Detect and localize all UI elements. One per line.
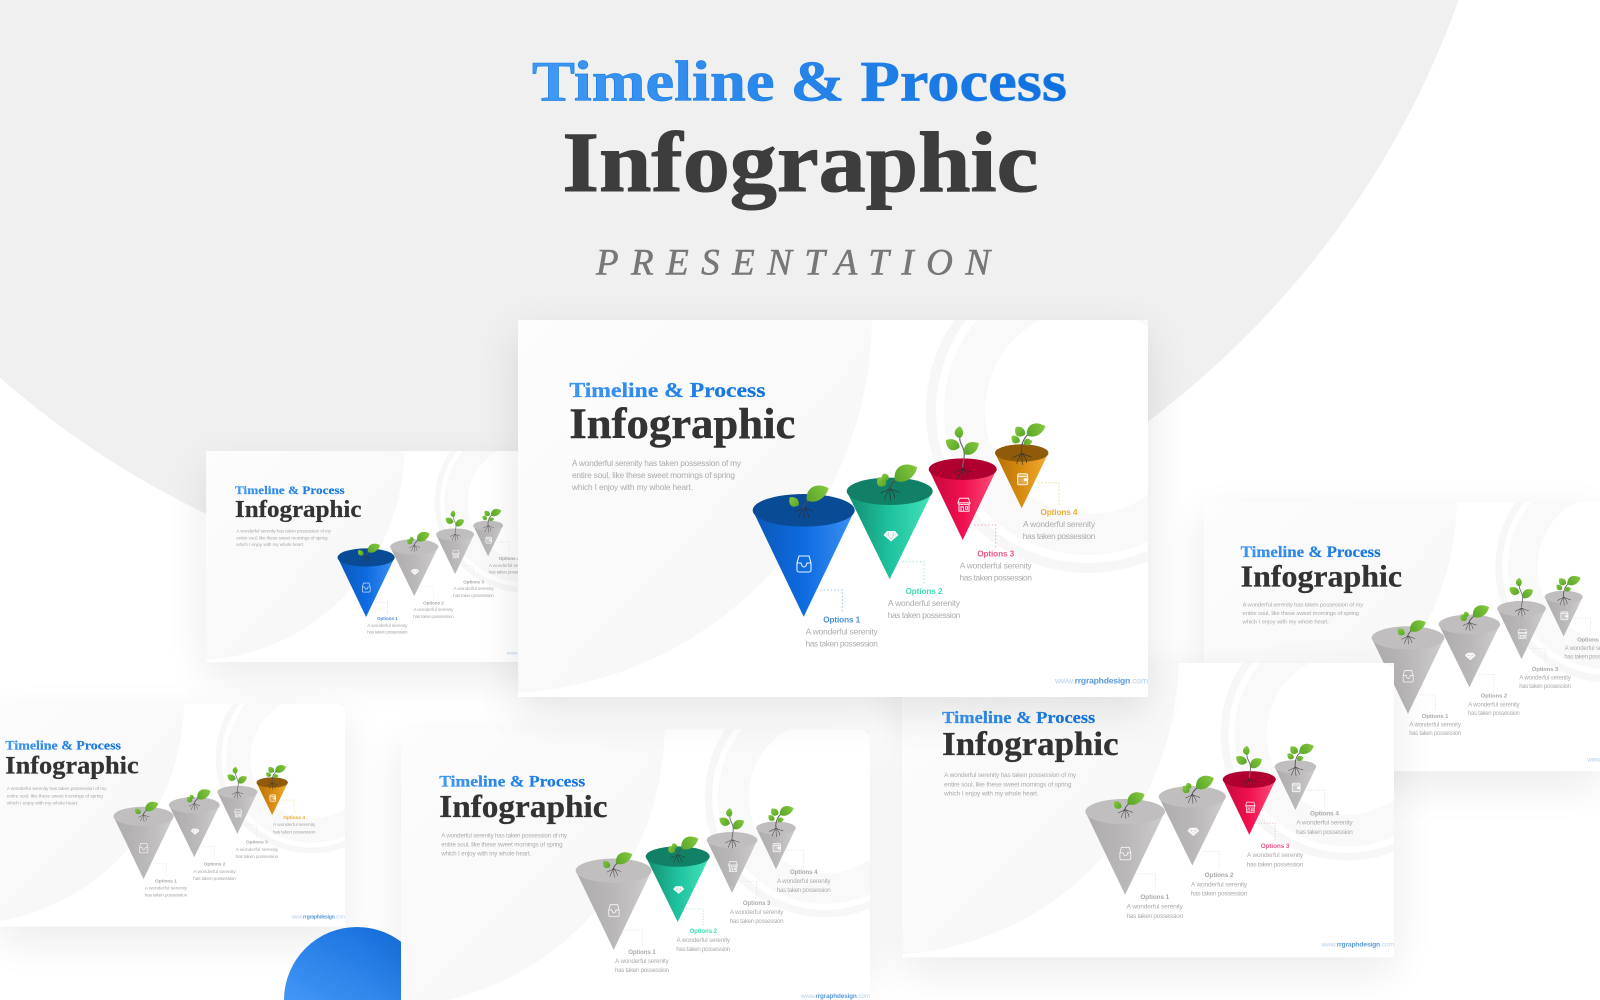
slide heading: Infographic: [1241, 559, 1402, 593]
slide: left, blue active: [206, 451, 560, 662]
slide paragraph: entire soul, like these sweet mornings of spring: [944, 781, 1072, 788]
cone 3: [1497, 578, 1546, 659]
labels: [1126, 810, 1353, 920]
cone 3: [436, 510, 474, 574]
slide heading: Timeline & Process: [439, 773, 585, 790]
labels: [1409, 637, 1600, 737]
labels: A wonderful serenity: [1247, 852, 1304, 859]
cone 2: [390, 529, 438, 596]
slide paragraph: A wonderful serenity has taken possession of my: [236, 529, 332, 534]
cone 1: [1372, 617, 1444, 714]
labels: A wonderful serenity: [888, 598, 961, 608]
slide heading: Infographic: [5, 752, 139, 780]
labels: has taken possession: [888, 610, 961, 620]
labels: has taken possession: [676, 946, 731, 953]
cone 2: [169, 786, 220, 857]
slide heading: Infographic: [569, 401, 795, 448]
decorative blue circle: [284, 927, 430, 1000]
subtitle: Presentation: PRESENTATION: [595, 242, 992, 283]
labels: Options 2: [689, 928, 718, 935]
labels: Options 3: [1532, 667, 1559, 673]
website: www.rrgraphdesign.com: [507, 650, 560, 656]
slide paragraph: which I enjoy with my whole heart.: [1242, 619, 1329, 625]
labels: has taken possession: [1468, 711, 1520, 717]
labels: Options 4: [283, 815, 305, 821]
slide paragraph: which I enjoy with my whole heart.: [571, 482, 693, 492]
cone 1: blue: [753, 481, 855, 617]
labels: A wonderful serenity: [1296, 820, 1353, 827]
website: www.rrgraphdesign.com: [1320, 942, 1394, 949]
slide heading: Timeline & Process: [1241, 544, 1381, 561]
slide paragraph: [440, 833, 568, 858]
slide heading: Timeline & Process: [235, 483, 345, 497]
labels: A wonderful serenity: [413, 607, 454, 612]
slide paragraph: entire soul, like these sweet mornings of spring: [7, 793, 103, 799]
cone 4: amber: [995, 420, 1048, 508]
labels: [145, 815, 316, 899]
slide paragraph: which I enjoy with my whole heart.: [236, 542, 304, 547]
labels: A wonderful serenity: [1023, 519, 1096, 529]
slide paragraph: which I enjoy with my whole heart.: [440, 851, 532, 858]
cone 1: [338, 541, 395, 617]
slide heading: Timeline & Process: [569, 378, 765, 402]
labels: has taken possession: [145, 893, 188, 899]
labels: [367, 556, 530, 635]
slide heading: [942, 708, 1119, 763]
labels: A wonderful serenity: [1409, 722, 1461, 728]
labels: has taken possession: [1296, 829, 1353, 836]
labels: A wonderful serenity: [676, 937, 731, 944]
labels: has taken possession: [235, 854, 278, 860]
labels: Options 1: [155, 878, 177, 884]
cone 1: [576, 848, 652, 950]
labels: Options 4: [1310, 810, 1339, 817]
slide heading: Infographic: [439, 788, 608, 824]
cone 2: [1439, 601, 1500, 687]
slide: main, all colours: [518, 320, 1148, 697]
labels: A wonderful serenity: [145, 886, 188, 892]
cone 2: [646, 833, 710, 922]
labels: Options 4: [499, 556, 520, 561]
slide paragraph: [1242, 602, 1363, 625]
labels: A wonderful serenity: [806, 626, 879, 636]
cone 1: [113, 799, 174, 879]
labels: has taken possession: [367, 630, 408, 635]
labels: Options 2: [423, 600, 444, 605]
slide paragraph: which I enjoy with my whole heart.: [943, 791, 1039, 798]
slide paragraph: entire soul, like these sweet mornings of spring: [441, 842, 563, 849]
labels: Options 1: [823, 615, 861, 624]
labels: A wonderful serenity: [960, 561, 1033, 571]
slide heading: Infographic: [235, 497, 362, 523]
labels: has taken possession: [273, 829, 316, 835]
labels: has taken possession: [1519, 684, 1571, 690]
labels: Options 1: [1422, 714, 1449, 720]
labels: A wonderful serenity: [615, 958, 670, 965]
cone 2: green: [847, 459, 933, 579]
labels: [805, 508, 1096, 648]
labels: Options 3: [246, 840, 268, 846]
slide paragraph: A wonderful serenity has taken possession of my: [1243, 602, 1363, 608]
labels: A wonderful serenity: [1191, 881, 1248, 888]
labels: Options 2: [204, 862, 226, 868]
labels: has taken possession: [805, 638, 878, 648]
slide: bottom middle, green active: [401, 740, 870, 1000]
labels: has taken possession: [777, 887, 831, 894]
labels: has taken possession: [615, 967, 669, 974]
slide paragraph: entire soul, like these sweet mornings of spring: [572, 470, 735, 480]
labels: Options 3: [463, 579, 484, 584]
labels: Options 3: [1261, 843, 1290, 850]
slide paragraph: [943, 772, 1077, 798]
labels: Options 1: [1140, 894, 1170, 901]
labels: has taken possession: [730, 918, 784, 925]
cone 3: [1223, 746, 1276, 835]
cone 4: [256, 763, 288, 815]
cone 4: [473, 507, 503, 556]
labels: has taken possession: [193, 876, 236, 882]
slide heading: [1241, 544, 1402, 593]
labels: A wonderful serenity: [273, 822, 316, 828]
labels: has taken possession: [413, 614, 454, 619]
slide heading: [439, 773, 608, 824]
labels: Options 4: [790, 869, 818, 876]
labels: A wonderful serenity: [453, 586, 494, 591]
labels: A wonderful serenity: [236, 847, 279, 853]
labels: has taken possession: [489, 570, 530, 575]
website: www.rrgraphdesign.com: [1054, 675, 1148, 685]
labels: Options 3: [743, 900, 771, 907]
slide paragraph: which I enjoy with my whole heart.: [7, 800, 78, 806]
labels: A wonderful serenity: [489, 563, 530, 568]
slide heading: Timeline & Process: [942, 708, 1096, 727]
slide paragraph: entire soul, like these sweet mornings of spring: [1243, 611, 1359, 617]
slide heading: [5, 739, 139, 780]
labels: Options 2: [906, 587, 943, 596]
labels: [615, 869, 831, 974]
labels: Options 1: [377, 616, 398, 621]
labels: Options 2: [1205, 872, 1234, 879]
labels: A wonderful serenity: [1127, 903, 1184, 910]
labels: A wonderful serenity: [1468, 702, 1520, 708]
slide heading: [235, 483, 362, 523]
cone 3: [707, 808, 757, 893]
labels: has taken possession: [1191, 891, 1248, 898]
slide paragraph: A wonderful serenity has taken possession of my: [572, 458, 742, 468]
labels: Options 3: [977, 550, 1015, 559]
labels: Options 4: [1040, 508, 1078, 517]
slide paragraph: A wonderful serenity has taken possession of my: [7, 786, 107, 792]
slide paragraph: [7, 786, 107, 806]
labels: A wonderful serenity: [1519, 676, 1571, 682]
background: large grey circle: [0, 0, 1512, 604]
labels: A wonderful serenity: [777, 878, 831, 885]
labels: A wonderful serenity: [193, 869, 236, 875]
slide heading: [569, 378, 795, 448]
cone 2: [1159, 772, 1226, 865]
labels: has taken possession: [453, 593, 494, 598]
slide paragraph: entire soul, like these sweet mornings of spring: [236, 535, 328, 540]
slide: bottom left, amber active: [2, 715, 345, 926]
slide paragraph: [236, 529, 332, 547]
labels: has taken possession: [1126, 913, 1183, 920]
labels: has taken possession: [1409, 731, 1461, 737]
labels: has taken possession: [1247, 862, 1304, 869]
website: www.rrgraphdesign.com: [800, 993, 870, 1000]
slide heading: Infographic: [942, 726, 1119, 763]
slide paragraph: [571, 458, 742, 492]
title line: Timeline & Process: Timeline & Process: [532, 51, 1067, 114]
labels: Options 2: [1481, 694, 1508, 700]
cone 4: [1545, 573, 1583, 637]
cone 4: [756, 803, 796, 869]
slide paragraph: A wonderful serenity has taken possession of my: [441, 833, 568, 840]
labels: Options 1: [628, 949, 656, 956]
labels: A wonderful serenity: [367, 623, 408, 628]
slide heading: Timeline & Process: [5, 739, 121, 753]
cone 3: red: [929, 426, 997, 540]
website: www.rrgraphdesign.com: [292, 914, 345, 920]
slide: bottom right, red active: [902, 663, 1394, 958]
slide: right, all grey: [1206, 512, 1600, 771]
cone 1: [1085, 788, 1165, 895]
labels: has taken possession: [959, 573, 1032, 583]
slide paragraph: A wonderful serenity has taken possession of my: [944, 772, 1077, 779]
cone 3: [217, 767, 257, 834]
title line: Infographic: Infographic: [562, 114, 1038, 210]
cone 4: [1275, 741, 1316, 810]
labels: A wonderful serenity: [730, 909, 784, 916]
main title: [532, 51, 1067, 283]
labels: has taken possession: [1023, 531, 1096, 541]
